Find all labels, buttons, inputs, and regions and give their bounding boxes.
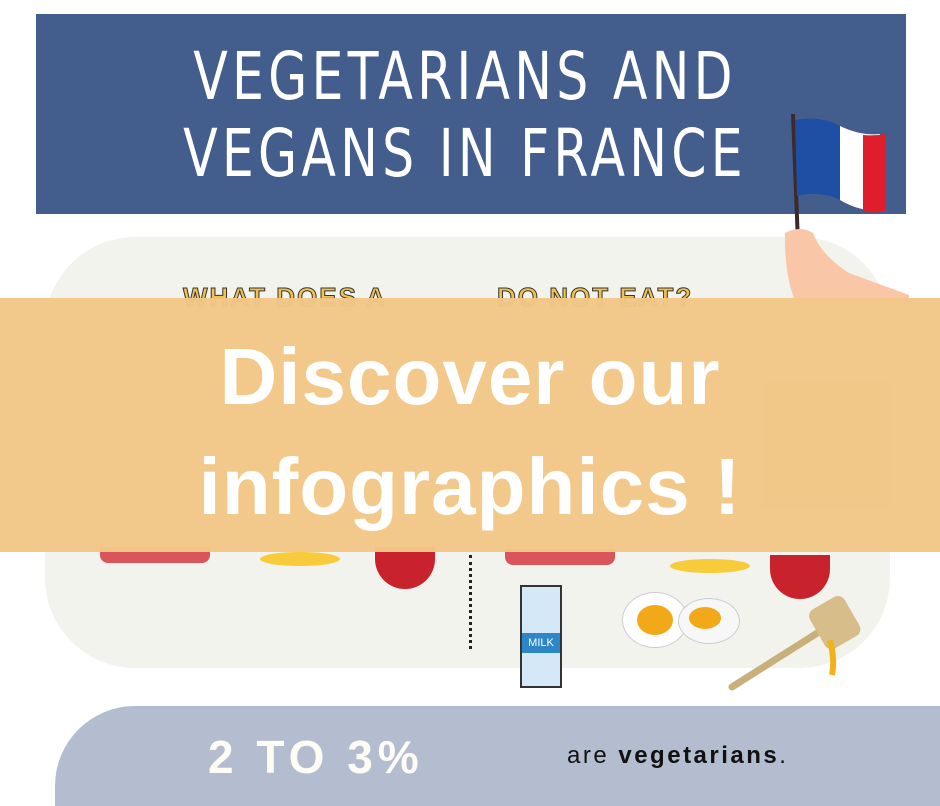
title text — [183, 38, 747, 192]
title banner — [36, 14, 906, 214]
title text: VEGETARIANS AND — [193, 38, 737, 115]
heading: what does a: WHAT DOES A — [183, 282, 387, 312]
panel: diet comparison — [45, 237, 890, 668]
icon: milk carton — [520, 585, 562, 688]
banner text: infographics ! — [199, 442, 741, 531]
icon: lobster right — [770, 555, 830, 599]
icon: lobster left — [375, 547, 435, 589]
stat pill — [55, 706, 940, 806]
icon: milk carton: MILK — [528, 637, 554, 649]
banner text: Discover our — [219, 332, 721, 421]
divider dotted — [469, 555, 472, 649]
icon: meat right — [505, 549, 615, 565]
banner: discover — [0, 298, 940, 552]
icon: honey dipper — [728, 596, 860, 690]
heading: do not eat: DO NOT EAT? — [497, 282, 693, 312]
icon: flag with hand — [784, 114, 909, 298]
title text: VEGANS IN FRANCE — [183, 115, 747, 192]
banner text — [199, 332, 741, 531]
icon: eggs — [622, 592, 740, 648]
stat text: are vegetarians. — [567, 742, 788, 769]
stat number: 2 TO 3% — [208, 731, 424, 783]
icon: meat left — [100, 547, 210, 563]
icon: fish left — [260, 552, 340, 566]
icon: fish right — [670, 559, 750, 573]
